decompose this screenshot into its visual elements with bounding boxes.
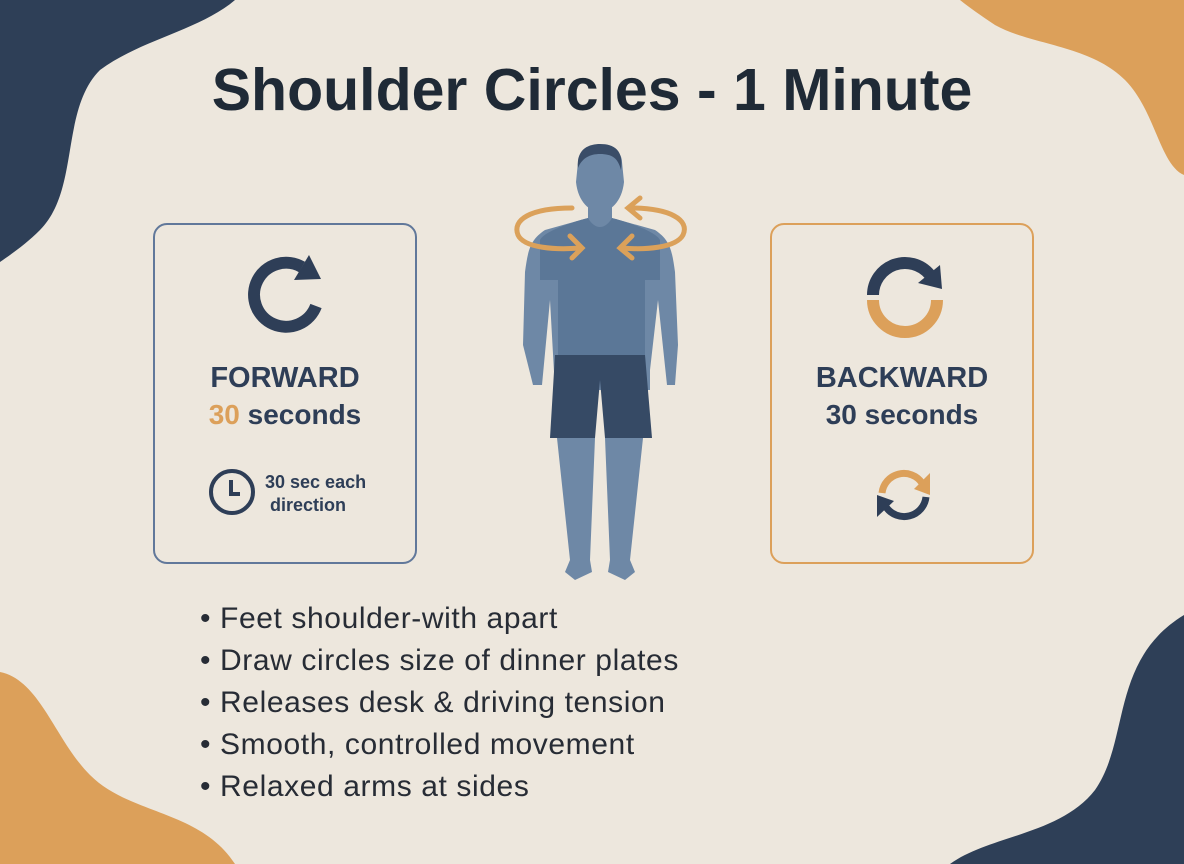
text: 30 seconds: 30 seconds — [826, 399, 978, 430]
text: 30 sec each direction: direction — [270, 495, 346, 515]
bullet list: • Feet shoulder-with apart — [200, 602, 558, 635]
panel: backward — [770, 223, 1034, 564]
icon: forward circle arrow — [248, 255, 322, 333]
figure: person with shoulder arrows — [514, 144, 687, 580]
text: 30 sec each direction: 30 sec each — [265, 472, 366, 492]
bullet list: • Releases desk & driving tension — [200, 686, 666, 719]
icon: small cycle arrows — [877, 470, 930, 520]
bullet list: • Relaxed arms at sides — [200, 770, 529, 803]
text: 30 sec each direction — [265, 472, 366, 515]
panel: forward — [153, 223, 417, 564]
icon: clock — [209, 469, 255, 515]
bullet list: • Draw circles size of dinner plates — [200, 644, 679, 677]
bullet list — [200, 602, 679, 803]
heading: FORWARD: FORWARD — [210, 362, 360, 394]
heading: BACKWARD: BACKWARD — [816, 362, 988, 394]
bullet list: • Smooth, controlled movement — [200, 728, 635, 761]
text: 30 seconds: 30 seconds — [209, 399, 361, 430]
icon: backward circle arrow — [867, 257, 943, 338]
title: Shoulder Circles - 1 Minute — [212, 57, 972, 123]
